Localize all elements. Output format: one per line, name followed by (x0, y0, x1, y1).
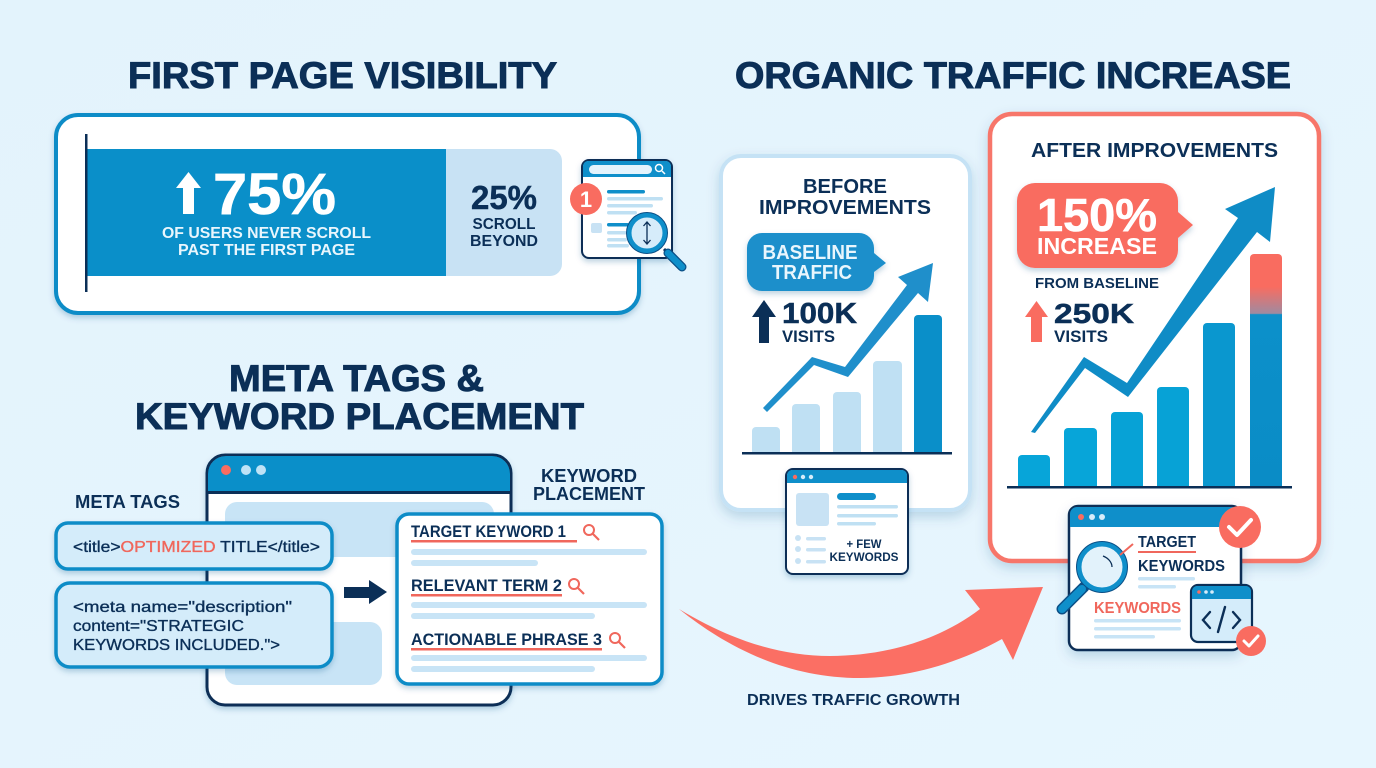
keyword 3 (411, 630, 647, 672)
icon: navy up arrow (752, 300, 776, 343)
icon: coral up arrow (1025, 301, 1048, 342)
panel: keyword placement list (397, 514, 662, 684)
heading: before improvements: BEFORE (803, 176, 887, 198)
stat: 250K visits: 250K (1054, 298, 1134, 329)
callout: baseline traffic (747, 233, 886, 291)
heading: meta tags & keyword placement (135, 358, 584, 437)
arrow: meta tags to keyword placement (344, 580, 387, 604)
icon: browser with target keywords (1062, 506, 1266, 656)
code box: meta description: content="STRATEGIC (73, 618, 244, 635)
code box: meta description (56, 583, 332, 667)
text: coral keywords: KEYWORDS (1094, 600, 1181, 617)
icon: large check badge (1219, 506, 1261, 548)
callout: 150% increase: 150% (1037, 189, 1157, 241)
icon: browser with few keywords: KEYWORDS (830, 550, 898, 564)
keyword 2 (411, 576, 647, 619)
panel: first page visibility (56, 115, 639, 313)
heading: before improvements (759, 176, 931, 219)
keyword 3: ACTIONABLE PHRASE 3 (411, 630, 602, 649)
axis line (85, 134, 88, 292)
bar: 75% segment (86, 149, 446, 276)
keyword 2: RELEVANT TERM 2 (411, 576, 562, 595)
title: first page visibility: FIRST PAGE VISIBILITY (128, 55, 557, 96)
keyword 1 (411, 522, 647, 566)
code box: meta description: <meta name="description" (73, 599, 292, 616)
code box: title tag: <title>OPTIMIZED TITLE</title> (73, 539, 320, 556)
icon: code window (1191, 585, 1252, 642)
trend arrow: before (763, 263, 933, 412)
stat: 100K visits: VISITS (782, 327, 835, 346)
arrow: drives traffic growth (679, 587, 1043, 678)
icon: browser with target keywords: KEYWORDS (1138, 558, 1225, 575)
heading: before improvements: IMPROVEMENTS (759, 197, 931, 219)
panel: before improvements (721, 156, 970, 510)
callout: 150% increase (1017, 183, 1193, 268)
code box: meta description: KEYWORDS INCLUDED."> (73, 637, 280, 654)
trend arrow: after (1031, 187, 1275, 433)
stat: 100K visits: 100K (782, 298, 857, 330)
text: scroll beyond: SCROLL (472, 216, 536, 233)
icon: browser with few keywords (786, 469, 908, 574)
keyword 1: TARGET KEYWORD 1 (411, 522, 566, 541)
label: keyword placement: PLACEMENT (533, 484, 645, 504)
icon: search results window with magnifier: 1 (580, 187, 592, 212)
badge: number 1 (570, 183, 602, 215)
label: keyword placement: KEYWORD (541, 466, 637, 486)
callout: 150% increase: INCREASE (1037, 233, 1157, 259)
heading: meta tags & keyword placement: KEYWORD PLACEMENT (135, 396, 584, 437)
panel: after improvements (990, 114, 1319, 561)
title: organic traffic increase: ORGANIC TRAFFIC INCREASE (735, 55, 1291, 96)
text: of users never scroll: OF USERS NEVER SCROLL (162, 225, 371, 242)
browser window: page illustration (207, 455, 511, 705)
label: drives traffic growth: DRIVES TRAFFIC GROWTH (747, 692, 960, 709)
icon: magnifier (1062, 542, 1133, 609)
bar chart: before (742, 315, 952, 454)
icon: white up arrow (176, 172, 201, 214)
callout: baseline traffic: TRAFFIC (772, 262, 852, 284)
label: meta tags: META TAGS (75, 492, 180, 512)
text: past the first page: PAST THE FIRST PAGE (178, 242, 355, 259)
stat: 25%: 25% (471, 179, 537, 216)
bar: 25% segment (440, 149, 562, 276)
stat: 250K visits (1054, 298, 1134, 346)
icon: search results window with magnifier (570, 160, 682, 267)
heading: meta tags & keyword placement: META TAGS & (229, 358, 484, 399)
stat: 100K visits (782, 298, 857, 346)
stat: 75%: 75% (213, 162, 336, 227)
text: few keywords: + FEW (846, 537, 882, 551)
panel: first page visibility: BEYOND (470, 233, 538, 250)
text: from baseline: FROM BASELINE (1035, 275, 1159, 292)
label: keyword placement (533, 466, 645, 504)
callout: baseline traffic: BASELINE (762, 242, 858, 264)
bar chart: after (1007, 254, 1292, 488)
icon: small check badge (1236, 626, 1266, 656)
text: target keywords: TARGET (1138, 534, 1196, 551)
code box: title tag (56, 523, 332, 569)
heading: after improvements: AFTER IMPROVEMENTS (1031, 140, 1278, 162)
stat: 250K visits: VISITS (1054, 327, 1108, 346)
